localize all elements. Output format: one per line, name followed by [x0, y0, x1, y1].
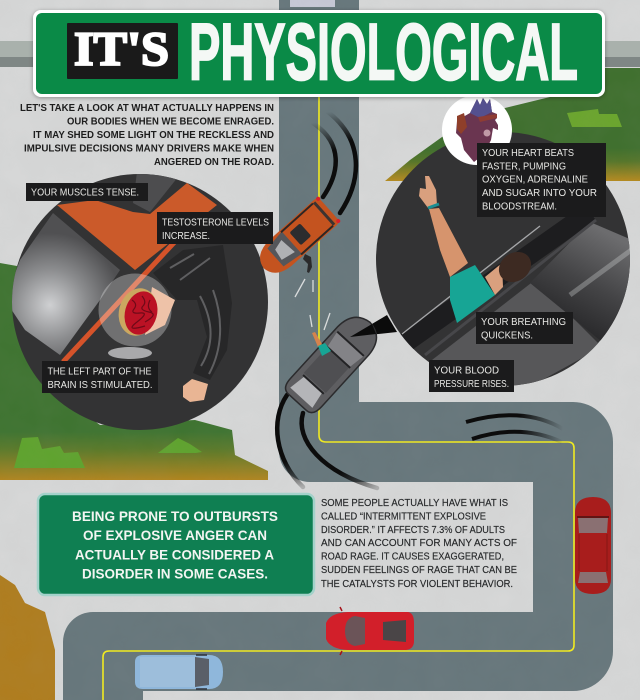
label: heart: OXYGEN, ADRENALINE [482, 174, 588, 186]
label: brain: BRAIN IS STIMULATED. [48, 380, 152, 391]
shirt [450, 265, 495, 323]
windscreen of orange car [5, 213, 120, 355]
grass: top right patch [385, 68, 640, 181]
car: grey [282, 308, 386, 416]
icon: heart in white circle [442, 95, 512, 165]
body text: intermittent explosive disorder: SOME PEOPLE ACTUALLY HAVE WHAT IS [321, 498, 508, 509]
callout: green disorder sign [38, 494, 314, 595]
callout: green disorder sign: DISORDER IN SOME CASES. [82, 566, 268, 582]
callout: green disorder sign: ACTUALLY BE CONSIDERED A [75, 546, 274, 562]
body text: intermittent explosive disorder: AND CAN ACCOUNT FOR MANY ACTS OF [321, 538, 517, 549]
intro text [20, 103, 274, 168]
neck [485, 263, 503, 295]
sign post left [0, 41, 36, 67]
grass: left patch [0, 263, 268, 480]
windscreen glare [570, 248, 634, 295]
label: heart [477, 143, 606, 217]
callout: green disorder sign: BEING PRONE TO OUTBURSTS [72, 508, 278, 524]
car roof [432, 284, 598, 386]
tyre marks: grey car [277, 395, 377, 488]
label: brain [42, 361, 158, 393]
body text: intermittent explosive disorder: CALLED “INTERMITTENT EXPLOSIVE [321, 512, 486, 522]
jacket [153, 245, 232, 380]
orange car roof [57, 183, 217, 270]
intro text: ANGERED ON THE ROAD. [154, 157, 274, 168]
intro text: LET'S TAKE A LOOK AT WHAT ACTUALLY HAPPENS IN [20, 103, 274, 114]
label: breathing [476, 312, 573, 344]
body text: intermittent explosive disorder: DISORDER.” IT AFFECTS 7.3% OF ADULTS [321, 525, 505, 536]
skid dashes [295, 279, 330, 330]
label: testosterone [157, 212, 273, 244]
figure beside orange car [303, 254, 312, 273]
label: muscles [26, 183, 148, 201]
arm and hand [419, 176, 468, 277]
body text: intermittent explosive disorder [321, 498, 517, 590]
hand [145, 287, 175, 335]
label: blood pressure [429, 360, 514, 392]
tyre marks: orange car [313, 112, 356, 213]
dark car trim [133, 174, 176, 212]
intro text: IMPULSIVE DECISIONS MANY DRIVERS MAKE WHEN [24, 144, 274, 154]
body text: intermittent explosive disorder: SUDDEN FEELINGS OF RAGE THAT CAN BE [321, 565, 517, 576]
panel: right circle, man pointing [375, 130, 635, 395]
dirt: bottom left patch [0, 575, 55, 700]
black pointer from car to circle [350, 315, 397, 337]
car: red sports [326, 607, 414, 655]
title sign [33, 8, 605, 98]
sign post right [603, 41, 640, 67]
hair [498, 252, 531, 282]
label: testosterone: TESTOSTERONE LEVELS [162, 218, 269, 228]
car: blue [135, 655, 223, 689]
label: heart: BLOODSTREAM. [482, 202, 557, 212]
label: breathing: YOUR BREATHING [481, 317, 566, 328]
panel: left circle, man holding brain [5, 172, 270, 434]
intro text: IT MAY SHED SOME LIGHT ON THE RECKLESS AND [33, 130, 274, 141]
intro text: OUR BODIES WHEN WE BECOME ENRAGED. [67, 116, 274, 128]
label: blood pressure: PRESSURE RISES. [434, 379, 509, 390]
callout: green disorder sign: OF EXPLOSIVE ANGER CAN [83, 527, 267, 543]
body text: intermittent explosive disorder: ROAD RAGE. IT CAUSES EXAGGERATED, [321, 552, 504, 562]
label: heart: FASTER, PUMPING [482, 162, 566, 172]
tyre marks: road right [466, 415, 563, 442]
brain [118, 288, 158, 336]
label: blood pressure: YOUR BLOOD [434, 366, 499, 376]
silver car part [108, 347, 152, 359]
car: orange [252, 196, 341, 281]
car door band [402, 212, 596, 355]
label: heart: YOUR HEART BEATS [482, 148, 574, 159]
orange door stripe [61, 244, 176, 361]
title badge: IT'S [74, 23, 169, 76]
pointer over grey car [350, 324, 376, 337]
label: heart: AND SUGAR INTO YOUR [482, 188, 597, 199]
label: muscles: YOUR MUSCLES TENSE. [31, 188, 139, 198]
label: testosterone: INCREASE. [162, 231, 210, 242]
road centre line [103, 97, 574, 700]
body text: intermittent explosive disorder: THE CATALYSTS FOR VIOLENT BEHAVIOR. [321, 579, 513, 590]
label: breathing: QUICKENS. [481, 330, 533, 342]
car windscreen [530, 222, 632, 342]
figure leaning from grey car [312, 332, 331, 356]
distant sign at top of road [290, 0, 335, 7]
fist [183, 379, 208, 402]
label: brain: THE LEFT PART OF THE [48, 366, 152, 378]
magnifying highlight [98, 274, 172, 346]
car: red sedan [575, 497, 611, 594]
